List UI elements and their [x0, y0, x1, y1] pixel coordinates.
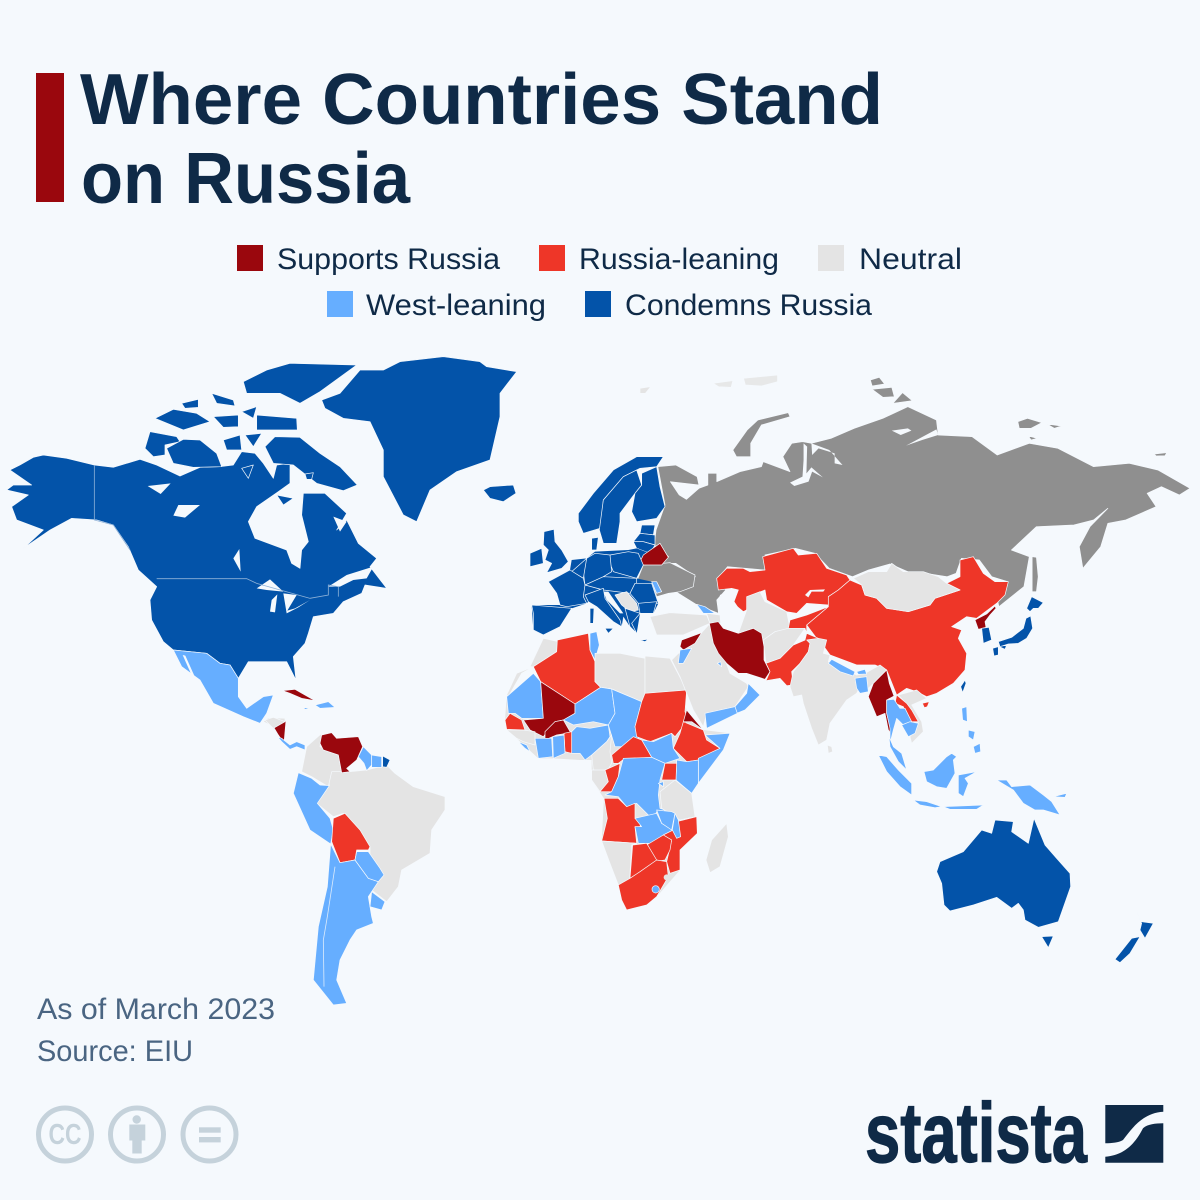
Central Asia — [738, 592, 790, 640]
Russia and Ukraine — [640, 375, 1190, 613]
Tanzania — [660, 780, 695, 820]
Mexico and Guatemala — [173, 650, 273, 723]
South Africa — [618, 860, 668, 910]
legend item: neutral: Neutral — [859, 243, 962, 276]
title — [80, 60, 883, 219]
Nigeria — [572, 725, 610, 760]
Colombia — [302, 733, 342, 787]
Ecuador and Peru — [293, 773, 333, 844]
Pakistan — [766, 633, 818, 686]
Indonesia, Malaysia, Philippines, Papua New Guinea — [878, 707, 1067, 815]
legend — [237, 243, 962, 322]
South America — [265, 717, 445, 1005]
legend item: neutral — [818, 243, 962, 276]
New Zealand — [1115, 937, 1140, 963]
China — [807, 557, 1008, 697]
source note: Source: EIU — [37, 1035, 193, 1068]
title accent bar — [36, 73, 64, 202]
Korea and North Korea — [975, 606, 996, 629]
North America and Greenland — [7, 357, 517, 743]
Africa south — [505, 713, 730, 910]
Myanmar — [868, 670, 894, 735]
Arabian peninsula — [672, 623, 748, 727]
legend item: Russia-leaning: Russia-leaning — [579, 243, 779, 276]
Algeria — [533, 633, 601, 704]
Ethiopia — [673, 722, 720, 762]
Cuba — [283, 689, 315, 701]
Syria — [680, 633, 702, 650]
Bolivia — [332, 813, 370, 863]
title: on Russia — [81, 139, 411, 219]
Belarus — [640, 543, 668, 565]
icon: creative commons — [38, 1108, 92, 1161]
Chile and Argentina — [313, 844, 378, 1005]
legend item: supports Russia: Supports Russia — [277, 243, 500, 276]
Nicaragua — [273, 721, 286, 743]
Turkey — [650, 613, 710, 635]
Angola — [602, 798, 642, 843]
Mongolia — [853, 563, 960, 612]
Southeast Asia — [898, 690, 927, 743]
India — [790, 638, 887, 745]
Europe — [483, 457, 695, 642]
Africa landmass base — [505, 680, 730, 910]
Greenland — [322, 357, 517, 522]
world map — [7, 357, 1190, 1005]
icon: attribution — [110, 1108, 164, 1161]
legend item: West-leaning: West-leaning — [366, 289, 546, 322]
Mali — [523, 682, 575, 737]
Ukraine — [637, 563, 695, 597]
Australia and New Zealand — [937, 818, 1153, 963]
Kazakhstan — [717, 548, 850, 613]
Madagascar — [706, 823, 728, 873]
Iran — [709, 622, 770, 679]
Asia — [709, 548, 1067, 815]
Iceland — [483, 485, 516, 502]
date note: As of March 2023 — [37, 993, 275, 1026]
Statista wordmark: statista — [865, 1086, 1088, 1180]
Sudan — [635, 690, 688, 742]
Canadian Arctic islands — [145, 363, 357, 505]
legend item: condemns Russia: Condemns Russia — [625, 289, 872, 322]
Japan — [993, 597, 1043, 656]
continental Europe landmass — [532, 548, 658, 635]
Brazil — [317, 765, 445, 902]
Australia — [937, 818, 1071, 927]
title: Where Countries Stand — [80, 60, 883, 140]
Venezuela — [320, 733, 363, 773]
icon: no derivatives — [183, 1108, 236, 1161]
DR Congo — [605, 757, 670, 820]
Africa north and Middle East — [507, 604, 760, 747]
icon: Statista logo mark — [1105, 1105, 1163, 1163]
Canada and USA mainland — [7, 452, 387, 680]
Taiwan — [961, 680, 966, 693]
Scandinavia — [578, 457, 663, 533]
icon: creative commons: CC — [48, 1119, 82, 1151]
Central and Western Europe — [610, 552, 643, 578]
